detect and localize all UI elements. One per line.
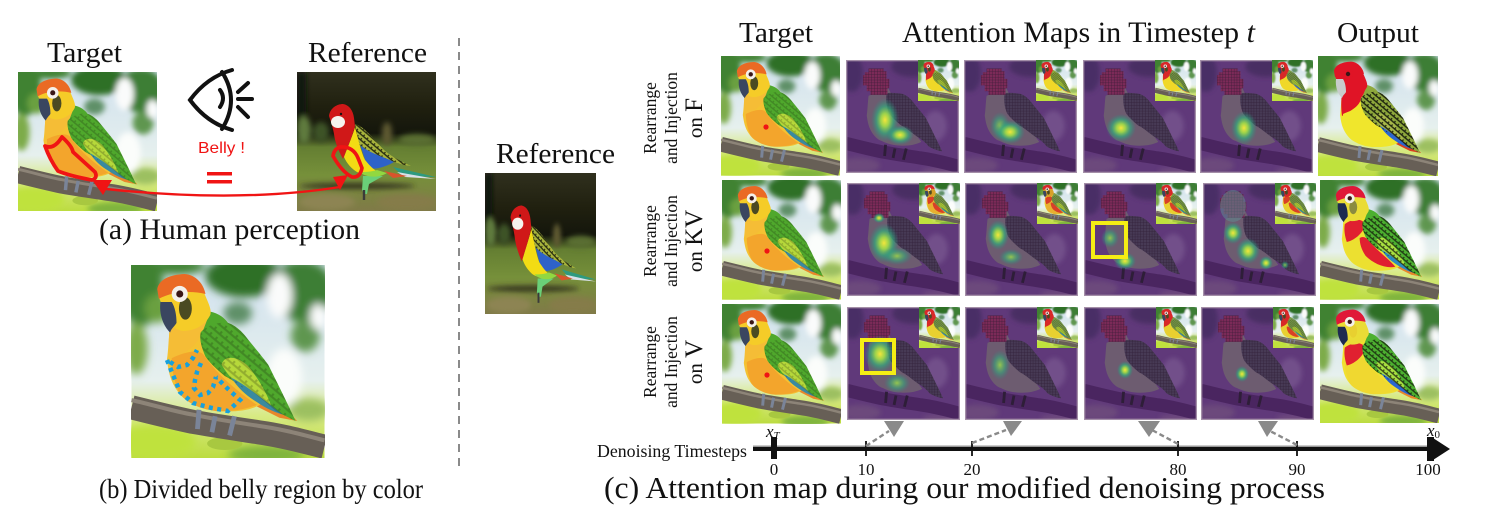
tick labels: 90	[1288, 460, 1306, 479]
output r2	[1308, 171, 1445, 303]
caption b: (b) Divided belly region by color	[99, 473, 423, 504]
panel: (a) human perception	[4, 37, 437, 246]
output r1	[1306, 46, 1444, 180]
attention map r2c2	[957, 177, 1080, 298]
arrow: step 20	[972, 421, 1022, 443]
panel: (c) attention maps	[485, 16, 1450, 505]
row label: V: and Injection	[661, 316, 681, 408]
row label: V	[640, 316, 708, 408]
image: reference parrot	[297, 72, 437, 211]
attention map r2c4	[1195, 177, 1318, 298]
label x_0: x	[1427, 421, 1435, 440]
attention map r3c1	[839, 301, 962, 422]
row 2 target	[710, 171, 847, 303]
attention map r1c2	[956, 54, 1079, 175]
row label: V: Rearrange	[640, 326, 660, 398]
row label: KV	[640, 195, 708, 287]
tick labels: 100	[1415, 460, 1441, 479]
row 1 target	[709, 47, 846, 179]
attention map r3c2	[957, 301, 1080, 422]
attention map r3c3	[1076, 301, 1199, 422]
attention map r1c3	[1075, 54, 1198, 175]
highlight box r2	[1093, 223, 1126, 257]
attention map r3c4	[1193, 301, 1316, 422]
outline: reference belly	[333, 147, 362, 177]
heading: attention maps: Attention Maps in Timestep t	[902, 16, 1256, 49]
highlight box r3	[862, 340, 894, 373]
label: belly: Belly !	[198, 140, 245, 157]
panel: (b) divided belly	[99, 249, 423, 504]
tick labels: 20	[964, 460, 980, 479]
label x_0: 0	[1435, 429, 1441, 441]
row label: F: and Injection	[661, 72, 681, 164]
heading: reference: Reference	[496, 138, 615, 170]
icon: eye	[190, 70, 252, 130]
axis arrow	[753, 437, 1450, 461]
row label: KV: Rearrange	[640, 205, 660, 277]
arrow: step 90	[1258, 421, 1297, 445]
outline: target belly	[45, 137, 96, 180]
heading: target: Target	[47, 37, 122, 69]
row label: F: Rearrange	[640, 82, 660, 154]
tick labels	[770, 460, 1441, 479]
row label: KV: and Injection	[661, 195, 681, 287]
tick labels: 0	[770, 460, 778, 479]
arrow: step 10	[866, 421, 904, 446]
heading: target: Target	[739, 17, 813, 49]
divider	[458, 38, 460, 466]
output r3	[1308, 294, 1445, 427]
timeline label: Denoising Timesteps	[597, 441, 747, 461]
row 3 target	[710, 295, 847, 427]
image: reference parrot	[485, 173, 596, 314]
row label: F	[640, 72, 708, 164]
tick labels: 10	[858, 460, 874, 479]
arrow: step 80	[1138, 421, 1178, 444]
attention map r2c1	[839, 177, 962, 298]
label x_T: x	[766, 422, 774, 441]
caption a: (a) Human perception	[99, 214, 360, 246]
attention map r1c4	[1192, 54, 1315, 175]
heading: reference: Reference	[308, 37, 427, 69]
arrow: correspondence	[92, 175, 348, 196]
attention map r1c1	[838, 54, 961, 175]
tick labels: 80	[1170, 460, 1186, 479]
heading: output: Output	[1337, 17, 1419, 49]
label x_T: T	[774, 430, 781, 442]
icon: equals sign	[207, 172, 232, 184]
outline: dotted belly regions	[167, 350, 240, 411]
image: big target parrot	[112, 249, 334, 464]
timeline	[597, 421, 1450, 479]
attention map r2c3	[1076, 177, 1199, 298]
row label: F: on F	[681, 98, 708, 138]
image: target parrot	[4, 60, 164, 216]
caption c: (c) Attention map during our modified denoising process	[604, 470, 1325, 505]
row label: V: on V	[681, 340, 708, 384]
row label: KV: on KV	[681, 210, 708, 272]
